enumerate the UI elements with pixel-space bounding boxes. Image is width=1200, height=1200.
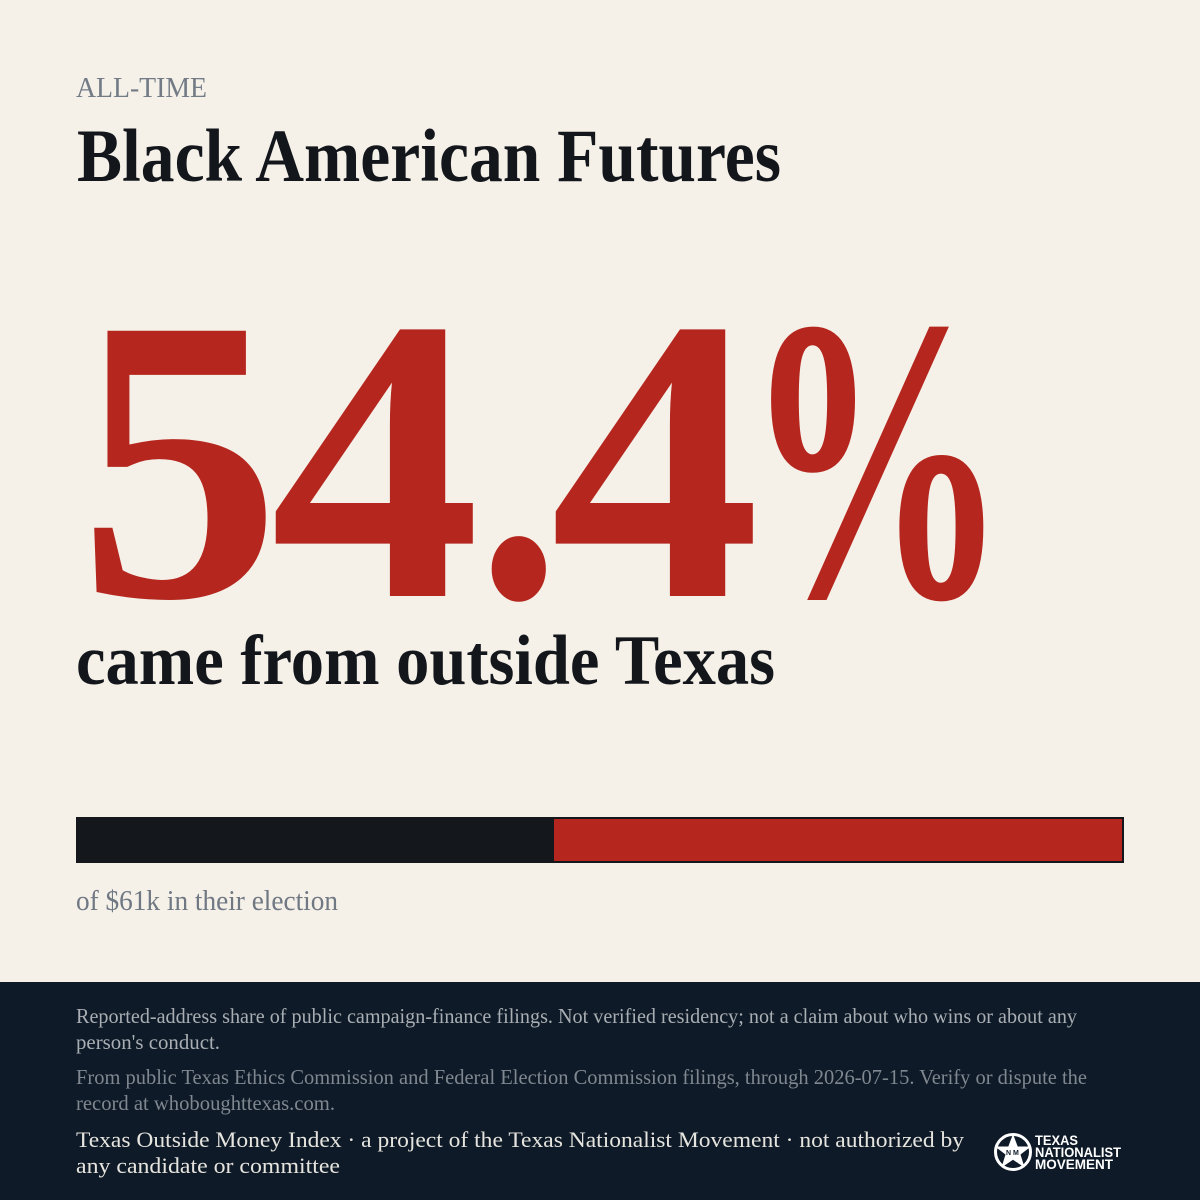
logo: Texas Nationalist Movement: [995, 1132, 1121, 1172]
disclaimer text: Reported-address share of public campaign-finance filings. Not verified residency; not a claim about who wins or about any: [76, 1004, 1077, 1028]
attribution text: Texas Outside Money Index · a project of the Texas Nationalist Movement · not authorized by: [76, 1127, 964, 1152]
big statistic: 54.4%: 5: [78, 235, 280, 684]
big statistic: 54.4%: 4: [550, 235, 761, 684]
logo: Texas Nationalist Movement: N M: [1006, 1150, 1019, 1157]
source text: From public Texas Ethics Commission and Federal Election Commission filings, through 2026-07-15. Verify or dispute the: [76, 1065, 1087, 1089]
big statistic: 54.4%: .: [477, 235, 561, 684]
subheading: came from outside Texas: [76, 622, 775, 700]
attribution text: [76, 1127, 964, 1178]
logo: Texas Nationalist Movement: TEXAS: [1035, 1132, 1078, 1148]
attribution text: any candidate or committee: [76, 1153, 340, 1178]
title: Black American Futures: [77, 115, 781, 198]
logo: Texas Nationalist Movement: NATIONALIST: [1035, 1144, 1121, 1160]
disclaimer text: [76, 1004, 1077, 1054]
big statistic: 54.4%: %: [744, 235, 1008, 684]
disclaimer text: person's conduct.: [76, 1030, 220, 1054]
eyebrow label: ALL-TIME: [76, 72, 207, 104]
source text: record at whoboughttexas.com.: [76, 1091, 335, 1115]
source text: [76, 1065, 1087, 1115]
big statistic: 54.4%: 4: [270, 235, 481, 684]
bar caption: of $61k in their election: [76, 885, 338, 917]
footer panel: [0, 982, 1200, 1200]
logo: Texas Nationalist Movement: MOVEMENT: [1035, 1156, 1113, 1172]
progress bar: [76, 817, 1124, 863]
